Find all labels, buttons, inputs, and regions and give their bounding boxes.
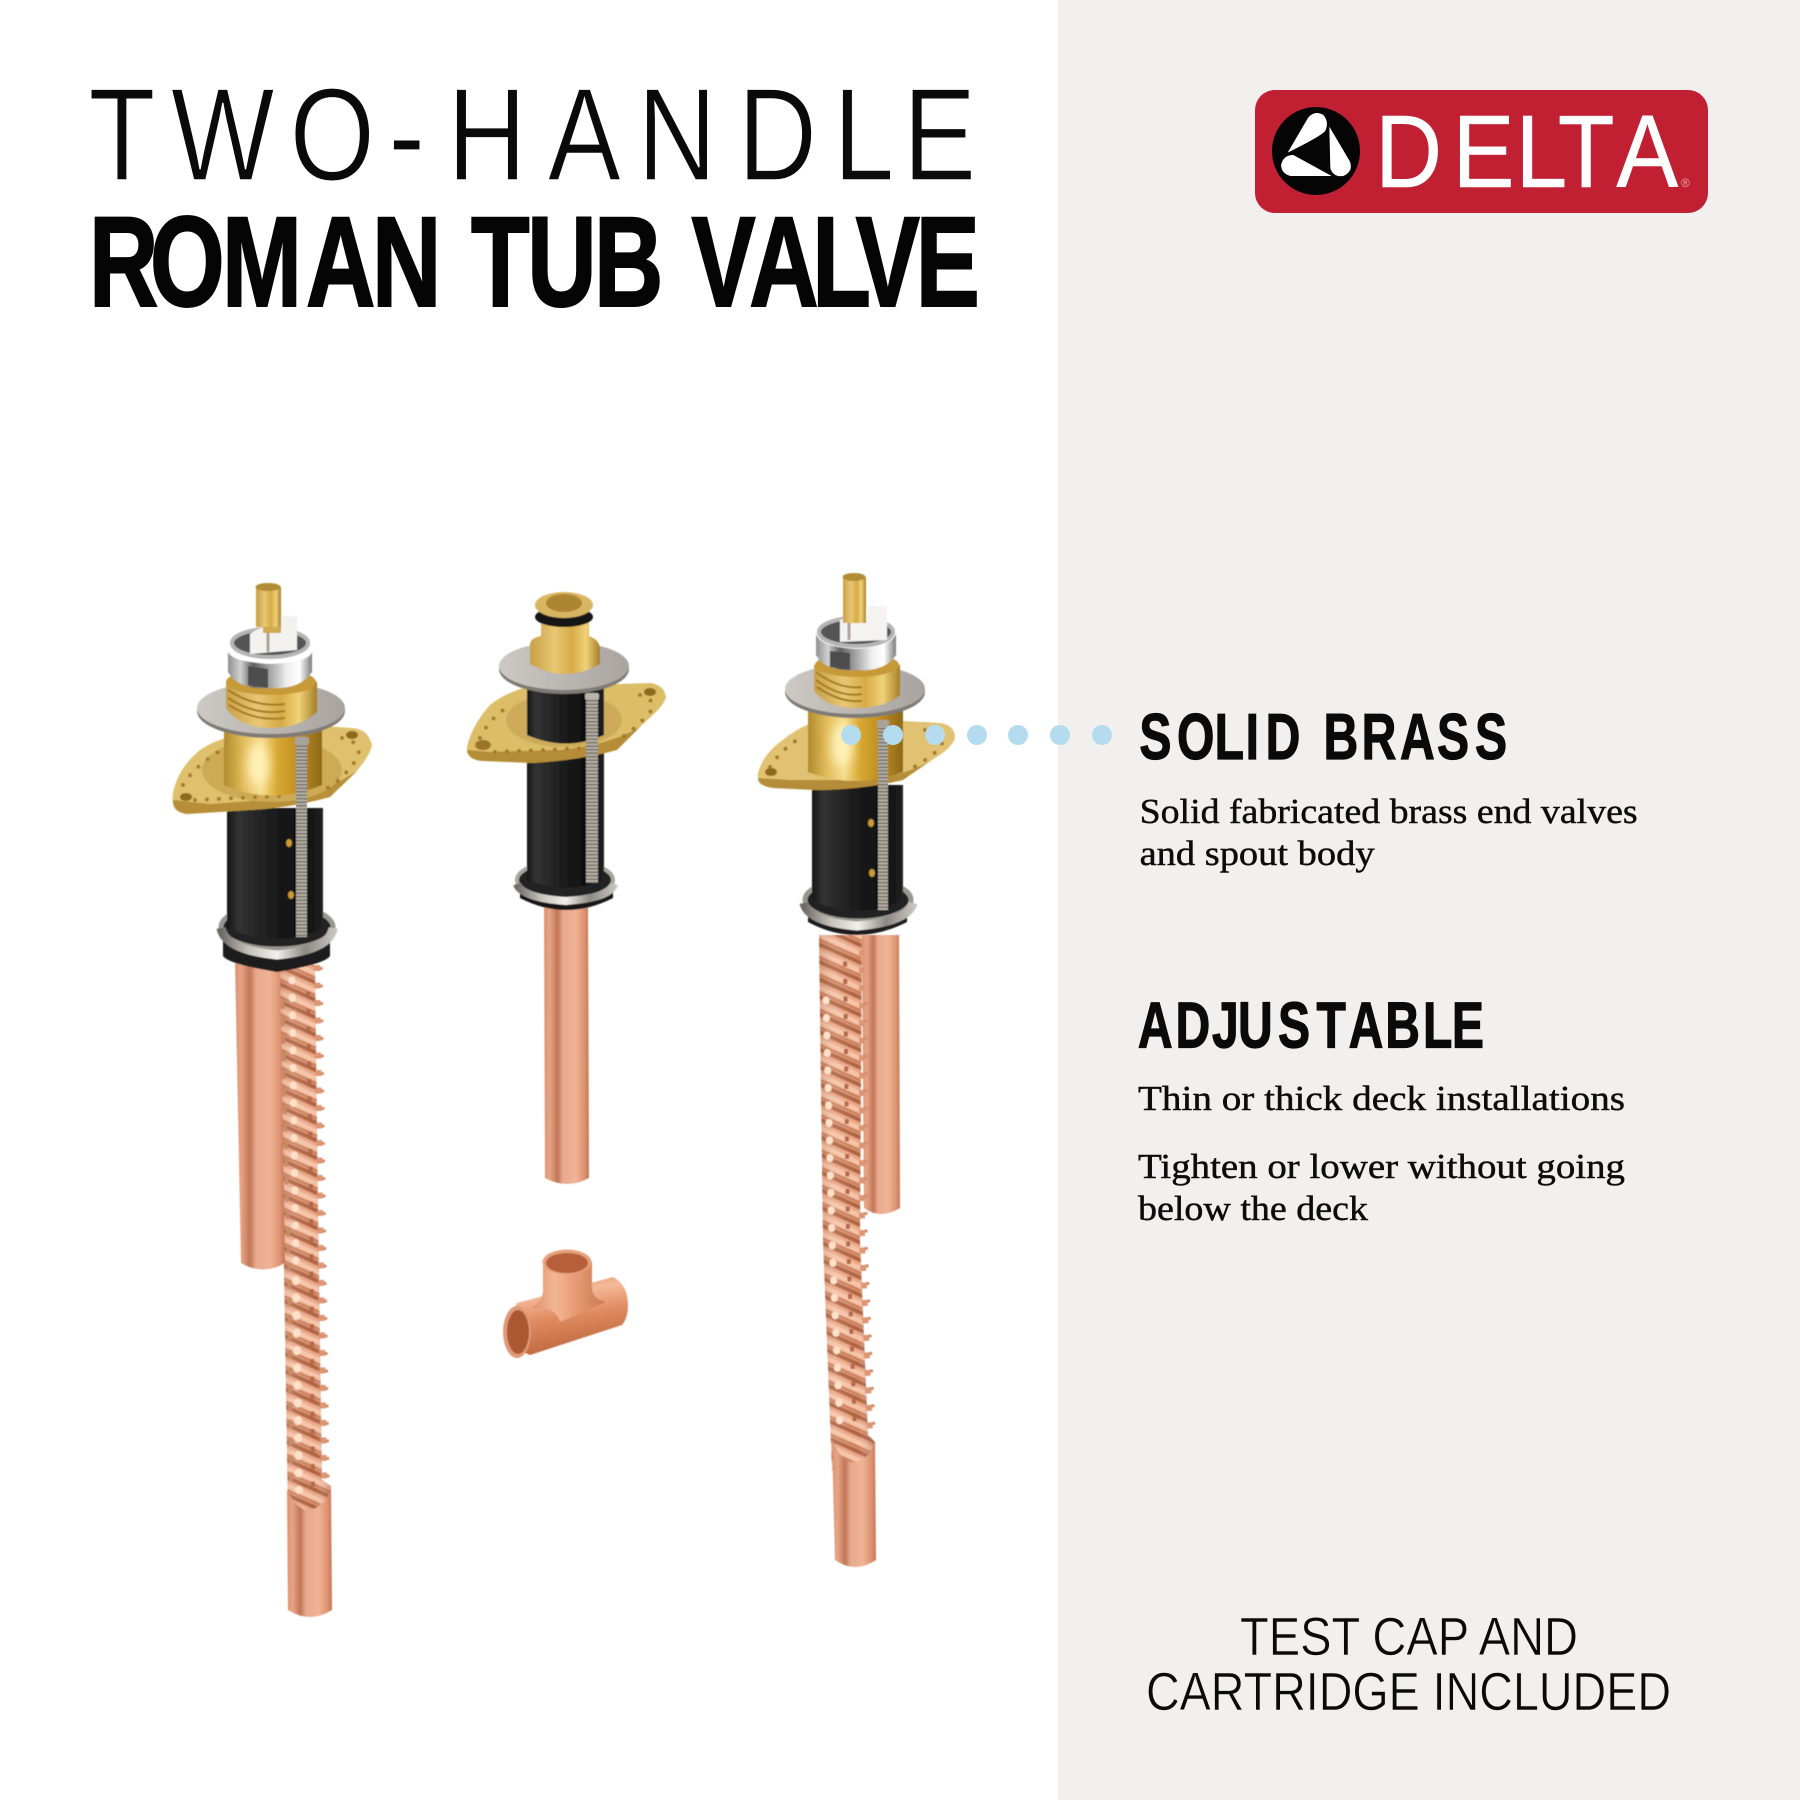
copper pipe — [544, 900, 589, 1184]
heading: adjustable: ADJUSTABLE — [1138, 990, 1484, 1062]
body: solid brass: and spout body — [1140, 834, 1375, 873]
retaining ring front — [804, 903, 913, 926]
black base — [808, 900, 907, 935]
photo: middle valve — [467, 592, 666, 1184]
photo: copper tee fitting — [503, 1250, 628, 1358]
twisted copper pipe — [278, 965, 332, 1617]
retaining ring back — [221, 905, 333, 949]
note: test cap and cartridge included: TEST CAP AND — [1240, 1607, 1578, 1667]
retaining ring front — [517, 884, 614, 901]
flange — [467, 683, 666, 763]
screw — [877, 720, 889, 910]
brass body — [224, 725, 322, 796]
chrome collar and cartridge — [228, 583, 312, 688]
panel: right grey column — [1058, 0, 1800, 1800]
flange — [758, 721, 955, 790]
black tube — [227, 808, 323, 939]
title line: two-handle: TWO-HANDLE — [88, 60, 976, 208]
twisted copper pipe — [819, 935, 876, 1567]
logo: Delta — [1255, 90, 1708, 213]
heading: solid brass: SOLID BRASS — [1139, 701, 1507, 774]
brass body — [808, 710, 903, 781]
tee left opening — [503, 1306, 531, 1358]
note: test cap and cartridge included: CARTRIDGE INCLUDED — [1146, 1662, 1671, 1722]
body: solid brass: Solid fabricated brass end valves — [1140, 792, 1638, 831]
upper black tube — [527, 688, 604, 744]
dotted callout leader — [841, 725, 1112, 745]
tee top opening — [542, 1250, 592, 1274]
feature: solid brass — [1139, 701, 1638, 873]
threaded brass nut — [226, 669, 317, 728]
black tube — [527, 690, 604, 888]
tee stub — [532, 1262, 606, 1322]
retaining ring back — [805, 879, 911, 921]
title line: roman tub valve: ROMAN TUB VALVE — [89, 191, 980, 333]
steel disc — [499, 642, 629, 694]
logo wordmark: DELTA — [1375, 93, 1679, 209]
brass pins — [868, 819, 875, 877]
steel disc — [785, 664, 925, 718]
body: adjustable: Thin or thick deck installations — [1138, 1079, 1625, 1118]
test cap — [530, 592, 600, 674]
retaining ring back — [517, 861, 613, 899]
flange — [173, 726, 372, 814]
black base — [520, 885, 613, 910]
body: adjustable: below the deck — [1138, 1189, 1369, 1228]
registered mark: ® — [1681, 176, 1690, 190]
chrome collar and cartridge — [816, 573, 896, 670]
logo background — [1255, 90, 1708, 213]
brass pins — [286, 839, 294, 899]
tee body — [505, 1277, 628, 1355]
feature: adjustable — [1138, 990, 1625, 1228]
body: adjustable: Tighten or lower without going — [1138, 1147, 1625, 1186]
title — [88, 60, 980, 333]
threaded brass nut — [814, 653, 900, 708]
retaining ring front — [221, 928, 333, 955]
photo: left valve — [173, 583, 372, 1617]
steel disc — [197, 682, 345, 738]
black tube — [812, 785, 903, 911]
straight copper pipe — [235, 960, 285, 1270]
logo icon — [1272, 107, 1360, 195]
screw — [585, 693, 599, 883]
black base — [223, 930, 330, 972]
photo: right valve — [758, 573, 955, 1567]
straight copper pipe — [862, 935, 900, 1214]
screw — [295, 737, 309, 937]
